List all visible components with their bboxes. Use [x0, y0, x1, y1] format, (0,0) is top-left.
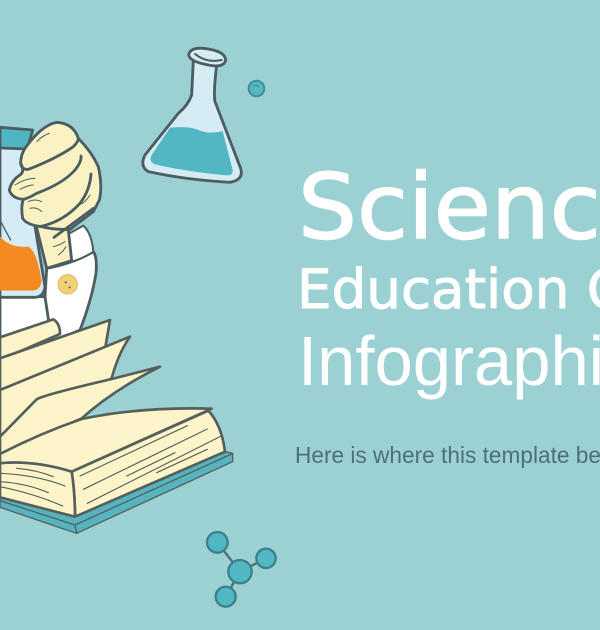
book cover — [0, 452, 233, 533]
subtitle: Here is where this template be — [295, 442, 600, 468]
right page block — [72, 411, 225, 517]
jar body — [0, 147, 45, 297]
page 1 — [0, 319, 60, 360]
illustration: hand holding jar — [0, 122, 101, 340]
orange liquid — [0, 237, 42, 291]
page lines — [0, 426, 220, 506]
icon: conical flask — [143, 48, 241, 182]
illustration: open book — [0, 319, 233, 533]
left page block — [0, 463, 75, 517]
button — [58, 275, 77, 294]
finger lines — [21, 138, 93, 237]
page 2 — [0, 320, 110, 392]
page 3 — [0, 337, 130, 437]
hand silhouette — [9, 122, 101, 229]
page 4 — [0, 367, 160, 455]
upper cuff — [68, 226, 93, 262]
wrist — [36, 225, 72, 268]
finger creases — [15, 133, 90, 212]
jar lid — [0, 127, 33, 149]
lab coat sleeve — [0, 252, 96, 340]
open page — [0, 408, 212, 472]
icon: molecule — [207, 532, 276, 607]
icon: small bubble — [249, 81, 264, 96]
